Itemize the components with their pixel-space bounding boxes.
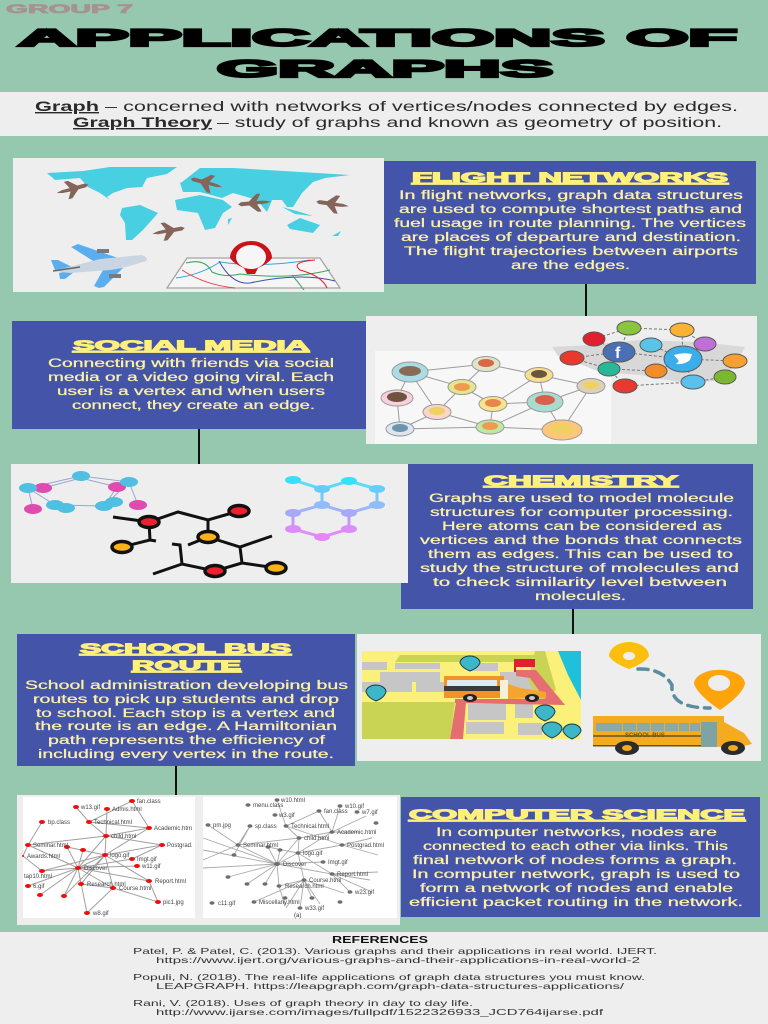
panel: school bus route: to school. Each stop is a vertex and xyxy=(36,708,335,720)
definitions band xyxy=(0,92,768,136)
red node graph: w13.gif xyxy=(80,805,100,811)
title xyxy=(18,25,737,83)
cyan and violet molecule xyxy=(285,476,385,541)
red node graph: Postgrad. xyxy=(167,843,193,849)
panel: school bus route: the route is an edge. A Hamiltonian xyxy=(35,721,337,733)
panel: computer science: final network of nodes forms a graph. xyxy=(413,855,737,867)
panel: computer science: In computer networks, nodes are xyxy=(436,827,717,839)
grey node graph: w10.html xyxy=(280,798,305,804)
grey node graph: Seminar.html xyxy=(243,843,278,849)
panel: computer science: COMPUTER SCIENCE xyxy=(409,807,745,822)
people network xyxy=(381,356,605,440)
image: chemistry molecules xyxy=(11,464,408,583)
references: LEAPGRAPH. https://leapgraph.com/graph-data-structures-applications/ xyxy=(156,981,625,991)
panel: social media: connect, they create an edge. xyxy=(72,400,315,412)
black molecule xyxy=(112,506,286,576)
panel: chemistry: Graphs are used to model molecule xyxy=(429,493,734,505)
image: social networks xyxy=(366,316,757,444)
definitions band: Graph Theory xyxy=(73,114,212,130)
panel: school bus route: path represents the efficiency of xyxy=(48,735,326,747)
panel: chemistry xyxy=(401,464,753,609)
teal pins xyxy=(366,656,581,739)
grey node graph: sp.class xyxy=(255,824,277,830)
connector: chemistry to school bus xyxy=(572,608,574,635)
references: REFERENCES xyxy=(332,935,428,946)
grey node graph: child.html xyxy=(304,836,329,842)
panel: chemistry: structures for computer processing. xyxy=(430,507,733,519)
grey node graph: logo.gif xyxy=(303,851,323,857)
connector: school bus to computer science xyxy=(175,765,177,796)
red node graph: Admis.html xyxy=(112,807,142,813)
panel: chemistry: study the structure of molecules and xyxy=(420,563,739,575)
pink and blue molecule xyxy=(19,471,147,514)
world map xyxy=(47,167,350,240)
red node graph: child.html xyxy=(111,834,136,840)
small bus xyxy=(444,676,546,702)
panel: flight networks: are the edges. xyxy=(511,260,630,272)
panel: computer science: connected to each other via links. This xyxy=(423,841,728,853)
panel: computer science: efficient packet routing in the network. xyxy=(409,897,743,909)
social icon cloud xyxy=(552,321,747,393)
connector: social to chemistry xyxy=(198,429,200,465)
references: Populi, N. (2018). The real-life applications of graph data structures you must know. xyxy=(133,972,645,982)
red node graph: fan.class xyxy=(137,799,161,805)
image: school bus route xyxy=(357,634,761,761)
image: computer network graphs xyxy=(17,795,400,925)
connector: flight to social xyxy=(585,283,587,317)
panel: chemistry: vertices and the bonds that connects xyxy=(420,535,742,547)
references: Rani, V. (2018). Uses of graph theory in day to day life. xyxy=(133,998,473,1008)
grey node graph: Technical.html xyxy=(291,824,329,830)
panel: flight networks: FLIGHT NETWORKS xyxy=(412,170,728,185)
grey node graph: fan.class xyxy=(324,809,348,815)
panel: flight networks xyxy=(384,161,756,284)
references xyxy=(0,932,768,1024)
red map pin xyxy=(230,241,272,274)
panel: computer science: In computer network, graph is used to xyxy=(412,869,740,881)
grey node graph: pm.jpg xyxy=(213,823,231,829)
red node graph: Course.html xyxy=(119,886,151,892)
definitions band: – study of graphs and known as geometry of position. xyxy=(217,114,722,130)
red node graph: Technical.html xyxy=(94,820,132,826)
definitions band: Graph xyxy=(35,98,99,114)
grey node graph: w23.gif xyxy=(354,890,374,896)
panel: flight networks: are used to compute shortest paths and xyxy=(399,204,742,216)
school bus: SCHOOL BUS xyxy=(625,733,665,739)
grey node graph: Academic.html xyxy=(337,830,376,836)
grey node graph: (a) xyxy=(294,913,301,919)
panel: computer science: form a network of nodes and enable xyxy=(420,883,733,895)
red node graph: Report.html xyxy=(155,879,186,885)
panel: social media: user is a vertex and when users xyxy=(57,386,325,398)
grey node graph: c11.gif xyxy=(218,901,236,907)
panel: flight networks: In flight networks, graph data structures xyxy=(399,190,743,202)
references: Patel, P. & Patel, C. (2013). Various graphs and their applications in real world. IJERT. xyxy=(133,946,657,956)
orange location pin xyxy=(694,670,745,710)
red node graph: Academic.htm xyxy=(154,826,192,832)
red node graph: w11.gif xyxy=(141,864,161,870)
school bus xyxy=(593,716,752,755)
social icon cloud: f xyxy=(615,345,621,362)
red node graph: Research.html xyxy=(87,882,126,888)
panel: school bus route: SCHOOL BUS xyxy=(80,641,291,656)
red node graph: bp.class xyxy=(48,820,70,826)
panel: chemistry: molecules. xyxy=(535,591,626,603)
panel: school bus route: routes to pick up students and drop xyxy=(33,694,339,706)
panel: chemistry: to check similarity level between xyxy=(433,577,727,589)
folded route map xyxy=(167,258,340,290)
panel: flight networks: are places of departure and destination. xyxy=(401,232,741,244)
panel: flight networks: fuel usage in route planning. The vertices xyxy=(394,218,746,230)
brown planes xyxy=(54,170,350,243)
title: APPLICATIONS OF xyxy=(18,25,737,52)
references: https://www.ijert.org/various-graphs-and-their-applications-in-real-world-2 xyxy=(156,955,640,965)
red node graph: tap10.html xyxy=(24,874,52,880)
red node graph: Discover xyxy=(84,866,107,872)
grey node graph: Report.html xyxy=(337,872,368,878)
red node graph: Seminar.html xyxy=(33,843,68,849)
red node graph xyxy=(22,797,195,918)
red node graph: w8.gif xyxy=(92,911,109,917)
panel: school bus route: School administration developing bus xyxy=(25,680,348,692)
panel: flight networks: The flight trajectories between airports xyxy=(404,246,738,258)
red node graph: 6.gif xyxy=(33,884,45,890)
red node graph: logo.gif xyxy=(110,853,130,859)
grey node graph: w7.gif xyxy=(361,810,378,816)
panel: social media: SOCIAL MEDIA xyxy=(73,338,310,353)
panel: school bus route xyxy=(17,634,355,766)
grey node graph: menu.class xyxy=(253,803,283,809)
panel: chemistry: them as edges. This can be used to xyxy=(428,549,733,561)
panel: social media: Connecting with friends via social xyxy=(48,358,334,370)
yellow location pin xyxy=(609,642,649,669)
street map with bus xyxy=(362,651,581,739)
grey node graph: w33.gif xyxy=(304,906,324,912)
grey node graph: Course.html xyxy=(309,878,341,884)
panel: computer science xyxy=(401,797,760,917)
grey node graph: Imgt.gif xyxy=(328,860,348,866)
grey node graph: w3.gif xyxy=(278,813,295,819)
grey node graph: w10.gif xyxy=(344,804,364,810)
grey node graph: Miscellany.html xyxy=(259,900,300,906)
grey node graph: Research.html xyxy=(285,884,324,890)
red node graph: Imgt.gif xyxy=(137,857,157,863)
panel: chemistry: CHEMISTRY xyxy=(484,473,678,488)
panel: social media xyxy=(12,321,366,429)
panel: social media: media or a video going viral. Each xyxy=(48,372,334,384)
title: GRAPHS xyxy=(217,56,553,83)
image: flight networks xyxy=(13,158,384,292)
grey node graph xyxy=(203,797,397,919)
red node graph: pic1.jpg xyxy=(163,900,184,906)
panel: chemistry: Here atoms can be considered as xyxy=(442,521,722,533)
blue plane xyxy=(51,244,147,288)
grey node graph: Discover xyxy=(283,862,306,868)
grey node graph: Postgrad.html xyxy=(347,843,384,849)
references: http://www.ijarse.com/images/fullpdf/1522326933_JCD764ijarse.pdf xyxy=(156,1007,604,1017)
red node graph: Awards.html xyxy=(27,854,60,860)
dashed route xyxy=(638,669,710,708)
panel: school bus route: ROUTE xyxy=(132,658,241,673)
panel: school bus route: including every vertex in the route. xyxy=(38,749,334,761)
group label: GROUP 7 xyxy=(6,4,133,16)
definitions band: – concerned with networks of vertices/nodes connected by edges. xyxy=(105,98,738,114)
